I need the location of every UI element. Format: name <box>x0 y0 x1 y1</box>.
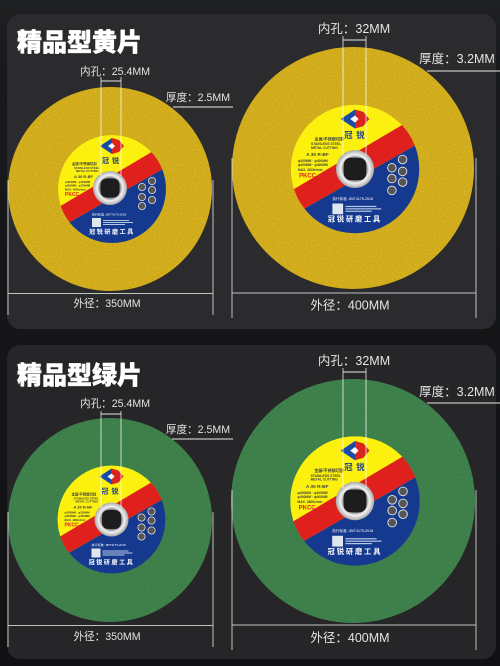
disc label: METAL CUTTING <box>76 169 99 173</box>
hub <box>93 171 127 205</box>
disc label <box>290 104 420 234</box>
disc label: 冠锐研磨工具 <box>89 228 135 236</box>
disc label: φ350MM · φ350MM <box>65 184 91 188</box>
icons <box>138 177 156 210</box>
disc: yellow 350 <box>8 87 212 291</box>
disc label: PKCC <box>299 173 317 179</box>
disc: green 400 <box>231 379 475 623</box>
disc label: MAX. 3800r/min <box>298 168 323 172</box>
panel: yellow discs <box>7 14 500 329</box>
disc label: MAX. 4800r/min <box>64 518 86 522</box>
disc label: PKCC <box>64 522 79 528</box>
logo <box>341 441 369 460</box>
icons <box>138 508 155 540</box>
disc label: MAX. 3800r/min <box>297 500 322 504</box>
disc: green 350 <box>8 418 212 622</box>
outer dimension 350: 外径：350MM <box>73 297 141 310</box>
outer dimension 350 <box>8 180 213 315</box>
thickness 2.5: 厚度：2.5MM <box>166 91 230 104</box>
title: green: 精品型绿片 <box>17 356 142 392</box>
disc label: STAINLESS STEEL <box>311 474 341 478</box>
disc label: STAINLESS STEEL <box>74 496 99 500</box>
disc label: φ400MM · φ400MM <box>298 163 328 167</box>
disc label: 冠锐研磨工具 <box>328 214 382 223</box>
outer dimension 400: 外径：400MM <box>310 631 390 645</box>
disc label <box>58 466 166 574</box>
label: inner 32: 内孔：32MM <box>318 22 390 36</box>
outer dimension 400 <box>232 490 476 650</box>
disc label: PKCC <box>65 192 80 198</box>
disc label: MAX. 4800r/min <box>65 188 86 192</box>
disc label: A 30 R-BF <box>74 174 94 179</box>
thickness 3.2 <box>419 384 500 403</box>
label: inner 25.4: 内孔：25.4MM <box>80 397 150 410</box>
logo <box>100 138 124 154</box>
title: yellow: 精品型黄片 <box>17 23 142 59</box>
hub <box>94 502 128 536</box>
disc label: 金属/不锈钢切割 <box>314 467 344 473</box>
label: inner 32: 内孔：32MM <box>318 354 390 368</box>
outer dimension 350: 外径：350MM <box>73 630 141 643</box>
disc label <box>290 436 420 566</box>
hub <box>336 482 374 520</box>
logo <box>341 110 369 129</box>
disc label: METAL CUTTING <box>311 478 338 482</box>
disc label: φ400MM · φ400MM <box>297 491 328 495</box>
disc label: A 30 R-BF <box>306 484 329 490</box>
disc label: φ350MM · φ350MM <box>64 510 90 514</box>
disc label: STAINLESS STEEL <box>74 166 100 170</box>
disc label: 执行标准: JB/T4175-2018 <box>332 528 373 533</box>
disc label: 冠锐研磨工具 <box>89 558 134 566</box>
disc label: A 30 R-BF <box>306 152 329 158</box>
panel: green discs <box>7 345 500 659</box>
disc label: 冠锐 <box>102 156 122 165</box>
disc label: φ350MM · φ350MM <box>65 180 91 184</box>
disc label: φ350MM · φ350MM <box>64 514 90 518</box>
icons <box>388 155 407 195</box>
disc label: φ400MM · φ400MM <box>298 159 328 163</box>
inner hole bracket 25.4 <box>101 411 121 508</box>
disc label: 金属/不锈钢切割 <box>315 135 344 141</box>
disc label: 金属/不锈钢切割 <box>72 161 97 166</box>
disc label: φ400MM · φ400MM <box>297 495 328 499</box>
disc label: STAINLESS STEEL <box>311 142 341 146</box>
thickness 3.2: 厚度：3.2MM <box>419 51 495 66</box>
inner hole bracket 25.4 <box>101 77 121 176</box>
disc label: 金属/不锈钢切割 <box>72 492 97 496</box>
disc label: 冠锐研磨工具 <box>328 547 382 556</box>
hub <box>336 150 374 188</box>
label: inner 25.4: 内孔：25.4MM <box>80 65 150 78</box>
disc label: 冠锐 <box>344 130 368 140</box>
disc label: 冠锐 <box>102 486 122 496</box>
disc: yellow 400 <box>232 47 474 289</box>
disc label: 执行标准: JB/T4175-2018 <box>92 212 127 216</box>
icons <box>388 487 407 527</box>
logo <box>100 468 124 484</box>
thickness 2.5: 厚度：2.5MM <box>166 423 230 436</box>
disc label <box>58 135 166 243</box>
disc label: 执行标准: JB/T4175-2018 <box>92 542 126 547</box>
disc label: METAL CUTTING <box>76 500 98 504</box>
disc label: PKCC <box>299 505 316 511</box>
disc label: METAL CUTTING <box>311 146 338 150</box>
thickness 3.2 <box>419 51 500 71</box>
disc label: 冠锐 <box>344 462 368 472</box>
inner hole bracket 32 <box>343 368 366 488</box>
outer dimension 400 <box>232 158 476 318</box>
outer dimension 400: 外径：400MM <box>310 298 390 312</box>
thickness 3.2: 厚度：3.2MM <box>419 384 495 399</box>
disc label: A 30 R-BF <box>74 504 93 510</box>
outer dimension 350 <box>8 512 213 647</box>
inner hole bracket 32 <box>343 36 366 155</box>
disc label: 执行标准: JB/T4175-2018 <box>332 196 373 201</box>
